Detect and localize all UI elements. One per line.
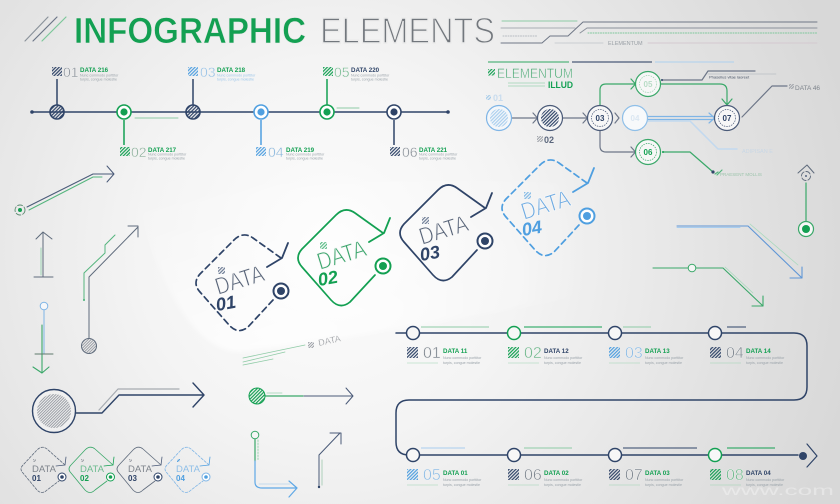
timeline point 02: 02 — [131, 144, 147, 160]
title: INFOGRAPHIC — [74, 10, 306, 51]
step 01: 01 — [423, 345, 441, 362]
step 06: DATA 02 — [544, 470, 569, 477]
flow labels: 01 — [493, 93, 503, 103]
timeline point 06 — [387, 105, 458, 160]
timeline point 04: Nunc commodo porttitor — [286, 152, 325, 156]
step 04: 04 — [726, 345, 744, 362]
mini data card 04: 04 — [176, 474, 185, 483]
timeline point 05 — [320, 64, 390, 119]
step 02: 02 — [524, 345, 542, 362]
timeline point 02 — [117, 105, 187, 160]
timeline point 05: 05 — [334, 64, 350, 80]
timeline point 04: turpis, congue molestie — [286, 156, 323, 160]
step 05 — [406, 448, 482, 487]
step 06 — [508, 448, 583, 487]
tilted data card 03: 03 — [418, 242, 441, 265]
flow labels: Phasellus vitae laoreet — [709, 74, 750, 80]
flow node 07: 07 — [723, 114, 732, 123]
step 03: Nunc commodo porttitor — [645, 356, 684, 360]
watermark: www.com — [720, 482, 834, 498]
serpentine timeline — [396, 326, 817, 487]
arrow: green circle pointing right — [249, 388, 353, 404]
timeline point 06: turpis, congue molestie — [419, 156, 456, 160]
timeline point 01: DATA 216 — [80, 67, 109, 74]
timeline: six data points — [30, 64, 458, 160]
flow node 04: 04 — [631, 114, 640, 123]
arrow: down with node — [33, 302, 53, 373]
flow node 03 — [588, 106, 612, 130]
mini data card 01: 01 — [32, 474, 41, 483]
flow labels — [486, 74, 820, 177]
timeline point 03: DATA 218 — [217, 67, 246, 74]
tilted data card 04: DATA — [518, 185, 574, 226]
timeline point 03: turpis, congue molestie — [217, 78, 254, 82]
small tag: data — [243, 333, 342, 365]
step 08: turpis, congue molestie — [746, 483, 783, 487]
flow labels: DATA 46 — [795, 85, 820, 92]
header rule lines: ELEMENTUM — [608, 41, 643, 47]
timeline point 05: Nunc commodo porttitor — [351, 74, 390, 78]
timeline point 05: DATA 220 — [351, 67, 380, 74]
step 01: DATA 11 — [443, 348, 468, 355]
timeline point 01: 01 — [63, 64, 79, 80]
tilted data card 03: DATA — [416, 210, 472, 251]
flow heading — [488, 62, 734, 90]
flow node 04 — [622, 106, 648, 130]
tilted data card 04: 04 — [520, 217, 543, 240]
step 02: turpis, congue molestie — [544, 361, 581, 365]
timeline point 05: turpis, congue molestie — [351, 78, 388, 82]
flow connectors — [512, 71, 787, 175]
timeline point 03: 03 — [200, 64, 216, 80]
step 04: turpis, congue molestie — [746, 361, 783, 365]
title slashes — [25, 17, 66, 41]
step 08: DATA 04 — [746, 470, 771, 477]
step 07: DATA 03 — [645, 470, 670, 477]
mini data card 02 — [69, 447, 114, 492]
timeline point 03: Nunc commodo porttitor — [217, 74, 256, 78]
header rule lines — [501, 21, 817, 47]
timeline point 06: DATA 221 — [419, 147, 448, 154]
arrow: hatched node bending upper right — [82, 226, 138, 354]
step 07: 07 — [625, 467, 643, 484]
icon: home pin on green stem — [798, 165, 814, 236]
step 06: turpis, congue molestie — [544, 483, 581, 487]
flow node 05: 05 — [644, 80, 653, 89]
timeline point 06: 06 — [402, 144, 418, 160]
serpentine end arrow — [799, 444, 817, 467]
step 05: DATA 01 — [443, 470, 468, 477]
step 07 — [608, 448, 697, 487]
timeline point 06: Nunc commodo porttitor — [419, 152, 458, 156]
timeline point 04: 04 — [268, 144, 284, 160]
step 08: 08 — [726, 467, 744, 484]
timeline point 02: turpis, congue molestie — [148, 156, 185, 160]
step 01: turpis, congue molestie — [443, 361, 480, 365]
flow labels: 02 — [544, 135, 554, 145]
flow diagram — [486, 62, 820, 177]
mini data card 01 — [21, 447, 66, 492]
step 04: Nunc commodo porttitor — [746, 356, 785, 360]
step 07: turpis, congue molestie — [645, 483, 682, 487]
step 03: turpis, congue molestie — [645, 361, 682, 365]
flow heading: ILLUD — [548, 80, 573, 90]
mini data card 01: DATA — [32, 464, 57, 475]
title — [25, 10, 495, 51]
flow node 06: 06 — [644, 148, 653, 157]
step 06: 06 — [524, 467, 542, 484]
step 05: turpis, congue molestie — [443, 483, 480, 487]
tilted data card 02: DATA — [314, 235, 370, 276]
arrow: big circle pointing right — [32, 383, 204, 432]
timeline point 01: turpis, congue molestie — [80, 78, 117, 82]
mini data card 03: 03 — [128, 474, 137, 483]
flow node 06 — [636, 140, 660, 164]
flow labels: PRAESENT MOLLIS — [720, 172, 762, 177]
timeline point 04 — [254, 105, 325, 160]
arrow: L-shaped right — [251, 431, 297, 497]
flow heading: ELEMENTUM — [497, 65, 573, 81]
flow node 07 — [714, 106, 740, 130]
step 06: Nunc commodo porttitor — [544, 478, 583, 482]
step 02: DATA 12 — [544, 348, 569, 355]
timeline point 04: DATA 219 — [286, 147, 315, 154]
step 03 — [608, 326, 684, 365]
step 03: 03 — [625, 345, 643, 362]
arrow: target to upper right — [15, 166, 114, 215]
timeline point 03 — [186, 64, 256, 119]
timeline point 02: DATA 217 — [148, 147, 177, 154]
tilted data card 04 — [502, 160, 594, 256]
arrow: bent up right — [318, 433, 341, 488]
step 08 — [708, 448, 785, 487]
step 05: Nunc commodo porttitor — [443, 478, 482, 482]
step 04: DATA 14 — [746, 348, 771, 355]
arrow: green diagonal with node — [653, 264, 763, 306]
title: ELEMENTS — [320, 10, 495, 51]
tilted data card 01: 01 — [214, 292, 237, 315]
timeline point 01: Nunc commodo porttitor — [80, 74, 119, 78]
step 02 — [508, 326, 602, 365]
step 07: Nunc commodo porttitor — [645, 478, 684, 482]
flow node 01 — [486, 106, 512, 130]
tilted data card 01 — [196, 235, 288, 331]
timeline point 02: Nunc commodo porttitor — [148, 152, 187, 156]
mini data card 02: 02 — [80, 474, 89, 483]
tilted data card 02 — [298, 210, 390, 306]
step 03: DATA 13 — [645, 348, 670, 355]
arrow: up with base — [34, 232, 53, 277]
timeline point 01 — [50, 64, 119, 119]
mini data card 04: DATA — [176, 464, 201, 475]
step 02: Nunc commodo porttitor — [544, 356, 583, 360]
step 05: 05 — [423, 467, 441, 484]
step 08: Nunc commodo porttitor — [746, 478, 785, 482]
flow labels: ADIPISAN E — [742, 149, 773, 155]
mini data card 02: DATA — [80, 464, 105, 475]
flow node 05 — [636, 72, 660, 96]
flow node 03: 03 — [596, 114, 605, 123]
mini data card 03 — [117, 447, 162, 492]
step 01: Nunc commodo porttitor — [443, 356, 482, 360]
step 01 — [406, 326, 489, 365]
tilted data card 02: 02 — [316, 267, 339, 290]
tilted data card 01: DATA — [212, 260, 268, 301]
mini data card 04 — [165, 447, 210, 492]
small tag: data: DATA — [317, 333, 342, 348]
step 04 — [708, 326, 785, 365]
flow node 02 — [538, 106, 562, 130]
mini data card 03: DATA — [128, 464, 153, 475]
tilted data card 03 — [400, 185, 492, 281]
arrow: blue diagonal — [677, 224, 802, 278]
